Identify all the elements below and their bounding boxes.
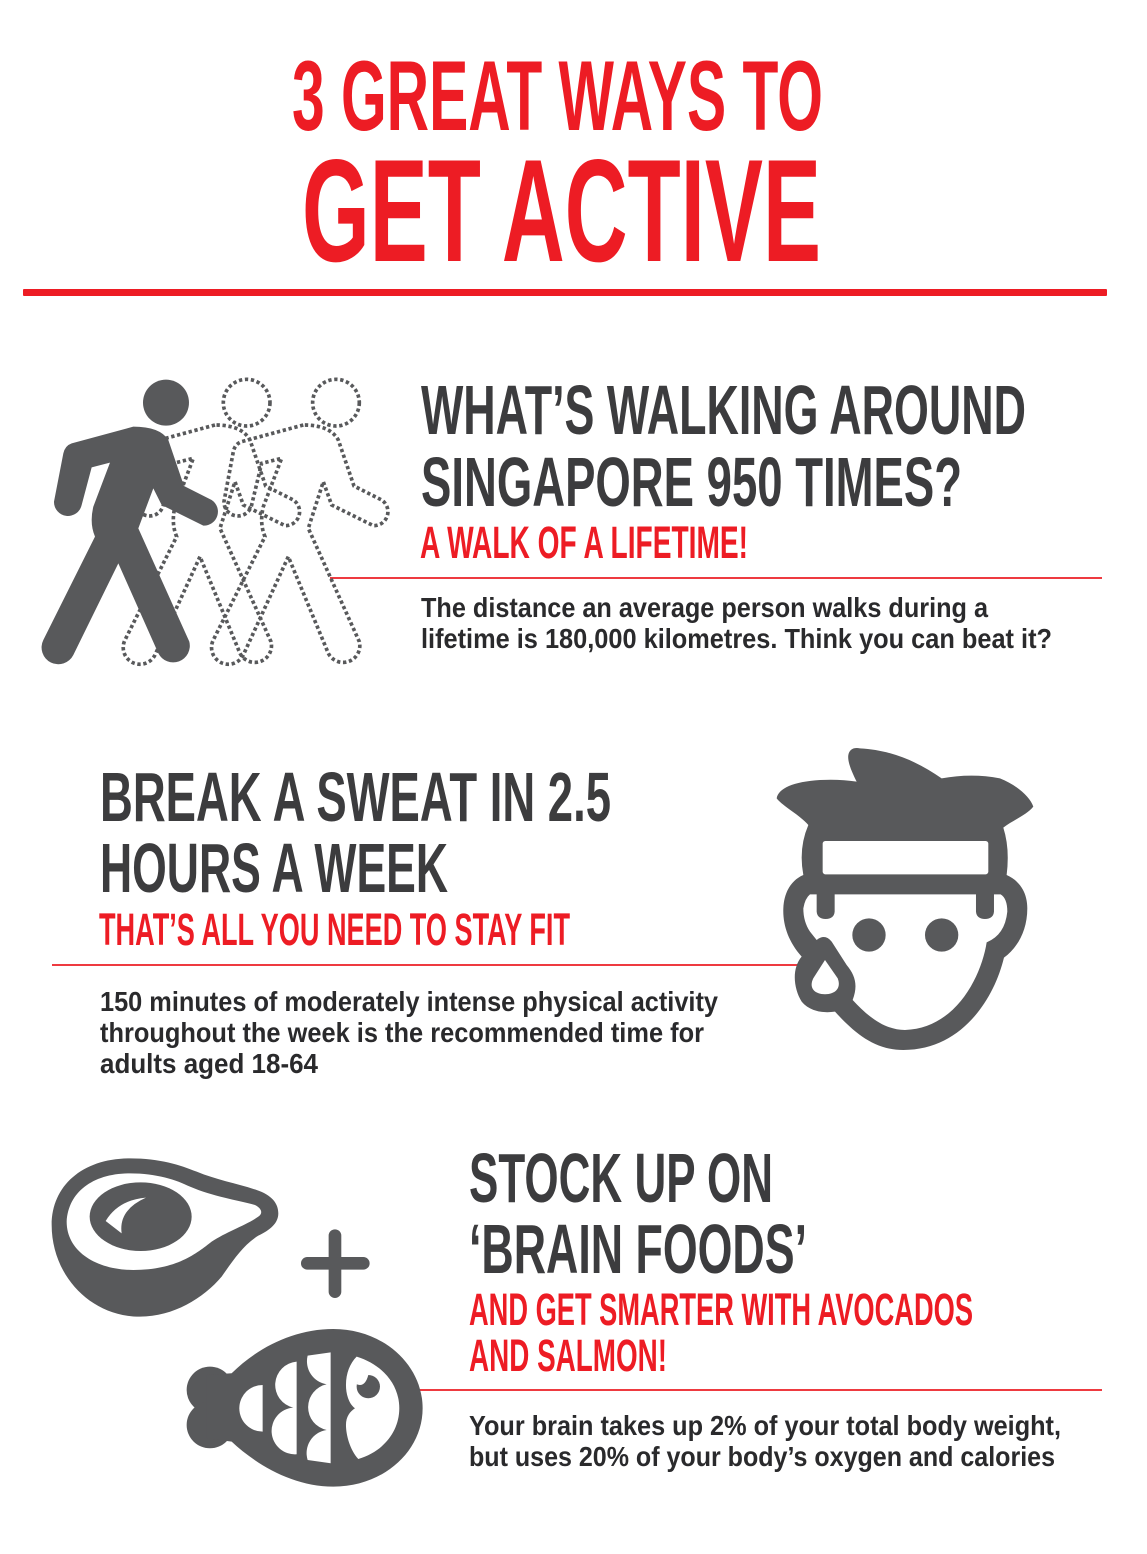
panel: brain foods (52, 1139, 1102, 1487)
heading: walking (421, 371, 1026, 521)
body text: sweat: adults aged 18-64 (100, 1048, 319, 1079)
heading: sweat (100, 758, 611, 907)
body text: walking (421, 592, 1052, 654)
body text: sweat (100, 986, 719, 1079)
title (292, 40, 823, 292)
heading: sweat: HOURS A WEEK (100, 829, 448, 907)
icon: fish (187, 1329, 423, 1487)
title: GET ACTIVE (302, 129, 821, 292)
body text: sweat: 150 minutes of moderately intense physical activity (100, 986, 719, 1017)
divider line: sweat (52, 964, 804, 966)
body text: sweat: throughout the week is the recommended time for (100, 1017, 704, 1048)
icon: avocado (52, 1158, 278, 1317)
heading: brain foods (469, 1139, 807, 1288)
body text: brain foods: Your brain takes up 2% of your total body weight, (469, 1410, 1061, 1441)
subheading: sweat: THAT’S ALL YOU NEED TO STAY FIT (99, 904, 570, 955)
heading: brain foods: ‘BRAIN FOODS’ (469, 1210, 807, 1288)
icon: sweating face with headband (777, 748, 1033, 1050)
divider line: brain foods (420, 1389, 1102, 1391)
body text: brain foods: but uses 20% of your body’s oxygen and calories (469, 1441, 1055, 1472)
heading: brain foods: STOCK UP ON (469, 1139, 773, 1217)
body text: brain foods (469, 1410, 1061, 1472)
body text: walking: The distance an average person walks during a (421, 592, 989, 623)
subheading: walking: A WALK OF A LIFETIME! (420, 517, 748, 568)
icon: walking person with dotted trail (42, 379, 388, 664)
icon: plus (307, 1236, 363, 1292)
subheading: brain foods: AND SALMON! (469, 1330, 667, 1381)
panel: sweat (52, 748, 1033, 1079)
panel: walking (42, 371, 1102, 664)
divider line: walking (330, 577, 1102, 579)
body text: walking: lifetime is 180,000 kilometres. Think you can beat it? (421, 623, 1052, 654)
title rule (23, 289, 1107, 296)
subheading: brain foods (469, 1284, 973, 1381)
heading: sweat: BREAK A SWEAT IN 2.5 (100, 758, 611, 836)
